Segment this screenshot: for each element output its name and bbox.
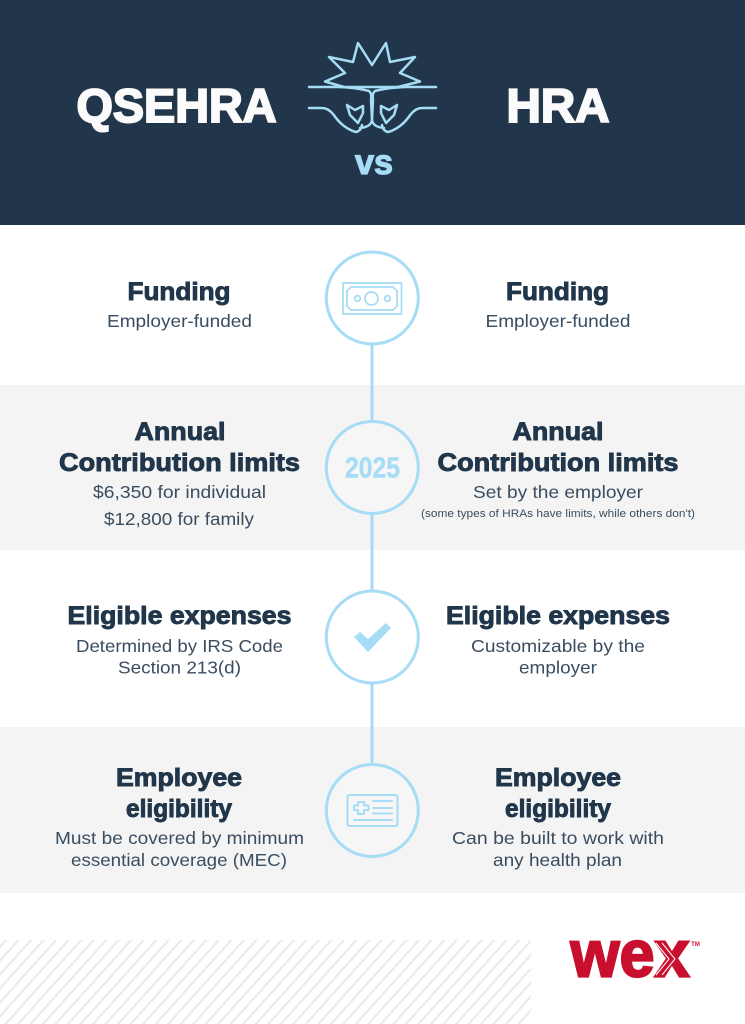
HRA limits text: Annual	[512, 418, 604, 446]
QSEHRA expenses text	[68, 602, 292, 678]
QSEHRA expenses text: Determined by IRS Code	[76, 636, 283, 656]
HRA limits text: Set by the employer	[473, 482, 643, 502]
HRA limits text	[421, 418, 695, 520]
row: employee eligibility	[55, 764, 664, 870]
HRA expenses text	[446, 602, 670, 678]
HRA eligibility text: Employee	[495, 764, 621, 792]
QSEHRA limits text: $12,800 for family	[104, 509, 254, 529]
HRA funding text: Funding	[506, 278, 609, 306]
HRA eligibility text: Can be built to work with	[452, 828, 664, 848]
QSEHRA limits text: Contribution limits	[59, 449, 300, 477]
HRA eligibility text: eligibility	[505, 795, 611, 823]
title: QSEHRA: QSEHRA	[76, 79, 276, 132]
HRA eligibility text: any health plan	[493, 850, 622, 870]
HRA eligibility text	[452, 764, 664, 870]
row: funding	[107, 252, 630, 344]
QSEHRA limits text: Annual	[134, 418, 226, 446]
QSEHRA expenses text: Section 213(d)	[118, 658, 241, 678]
row: eligible expenses	[68, 591, 670, 683]
HRA expenses text: employer	[519, 658, 597, 678]
icon: 2025: 2025	[345, 452, 400, 484]
QSEHRA funding text: Employer-funded	[107, 311, 252, 331]
icon: 2025	[326, 422, 418, 514]
QSEHRA limits text: $6,350 for individual	[93, 482, 266, 502]
logo: WEX: TM	[691, 942, 700, 948]
icon: insurance card	[326, 764, 418, 856]
HRA limits text: Contribution limits	[438, 449, 678, 477]
icon: fist bump	[309, 43, 436, 132]
QSEHRA eligibility text: Employee	[116, 764, 242, 792]
QSEHRA expenses text: Eligible expenses	[68, 602, 292, 630]
HRA expenses text: Customizable by the	[471, 636, 645, 656]
QSEHRA eligibility text: eligibility	[126, 795, 232, 823]
QSEHRA eligibility text	[55, 764, 304, 870]
title: HRA: HRA	[506, 79, 610, 132]
timeline connector	[370, 340, 374, 770]
header band	[0, 0, 745, 225]
logo: WEX: wex	[570, 916, 690, 990]
QSEHRA funding text	[107, 278, 252, 331]
vs label: vs	[355, 143, 393, 182]
icon: banknote	[326, 252, 418, 344]
QSEHRA limits text	[59, 418, 300, 529]
QSEHRA funding text: Funding	[128, 278, 230, 306]
HRA funding text: Employer-funded	[486, 311, 630, 331]
QSEHRA eligibility text: Must be covered by minimum	[55, 828, 304, 848]
QSEHRA eligibility text: essential coverage (MEC)	[71, 850, 287, 870]
row: annual contribution limits	[59, 418, 695, 529]
icon: checkmark	[326, 591, 418, 683]
striped footer panel	[0, 940, 531, 1024]
HRA funding text	[486, 278, 630, 331]
HRA expenses text: Eligible expenses	[446, 602, 670, 630]
HRA limits text: (some types of HRAs have limits, while others don't)	[421, 508, 695, 520]
